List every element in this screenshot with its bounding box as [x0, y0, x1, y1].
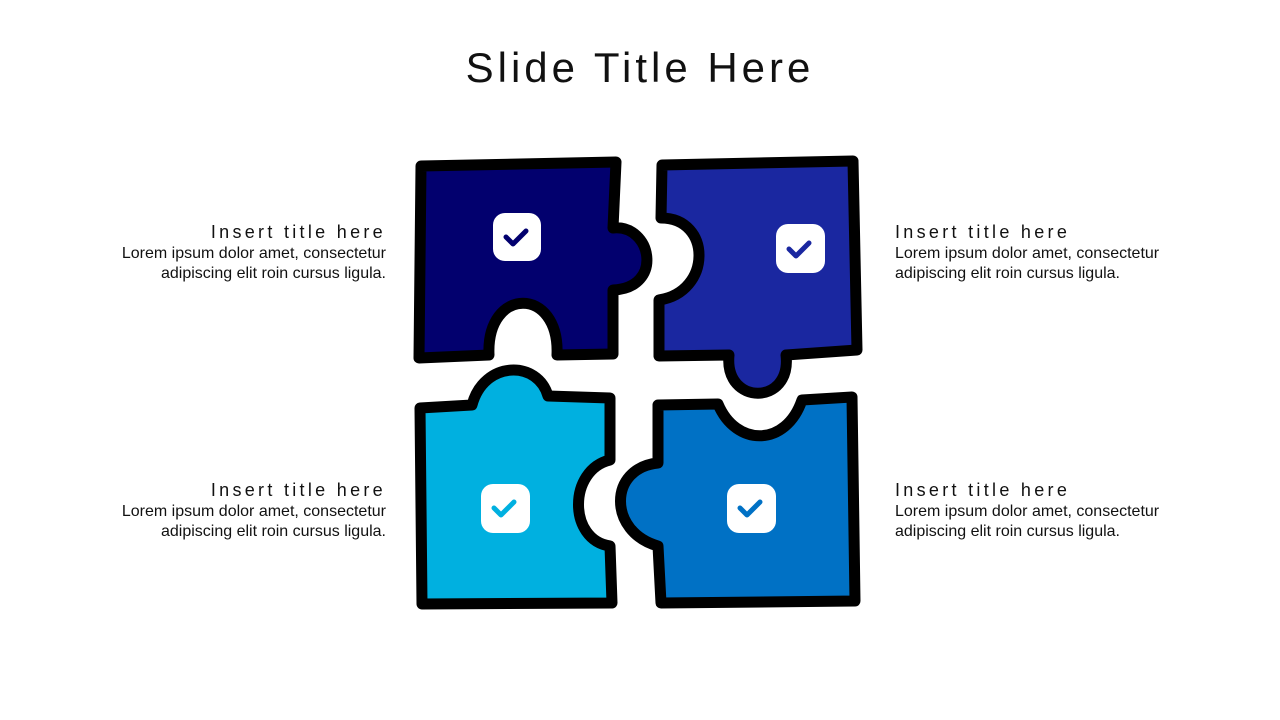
piece: top-left: [419, 162, 647, 358]
text block: bottom-left: [122, 480, 386, 540]
text block: top-left: Insert title here: [211, 222, 386, 242]
text block: bottom-left: adipiscing elit roin cursus ligula.: [161, 522, 386, 540]
text block: top-right: Insert title here: [895, 222, 1070, 242]
text block: bottom-right: Lorem ipsum dolor amet, consectetur: [895, 503, 1159, 520]
piece: bottom-right: [620, 397, 855, 603]
text block: bottom-left: Lorem ipsum dolor amet, consectetur: [122, 503, 386, 520]
text block: bottom-right: Insert title here: [895, 480, 1070, 500]
icon: check top-right: [776, 224, 825, 273]
icon: check top-left: [493, 213, 541, 261]
text block: bottom-right: adipiscing elit roin cursus ligula.: [895, 522, 1120, 540]
text block: bottom-right: [895, 480, 1159, 540]
title: Slide Title Here: [466, 44, 814, 91]
text block: top-left: Lorem ipsum dolor amet, consectetur: [122, 245, 386, 262]
text block: top-right: Lorem ipsum dolor amet, consectetur: [895, 245, 1159, 262]
piece: bottom-left: [420, 370, 612, 604]
text block: bottom-left: Insert title here: [211, 480, 386, 500]
icon: check bottom-right: [727, 484, 776, 533]
text block: top-left: adipiscing elit roin cursus ligula.: [161, 264, 386, 282]
icon: check bottom-left: [481, 484, 530, 533]
text block: top-right: [895, 222, 1159, 282]
piece: top-right: [659, 161, 857, 393]
text block: top-left: [122, 222, 386, 282]
text block: top-right: adipiscing elit roin cursus ligula.: [895, 264, 1120, 282]
